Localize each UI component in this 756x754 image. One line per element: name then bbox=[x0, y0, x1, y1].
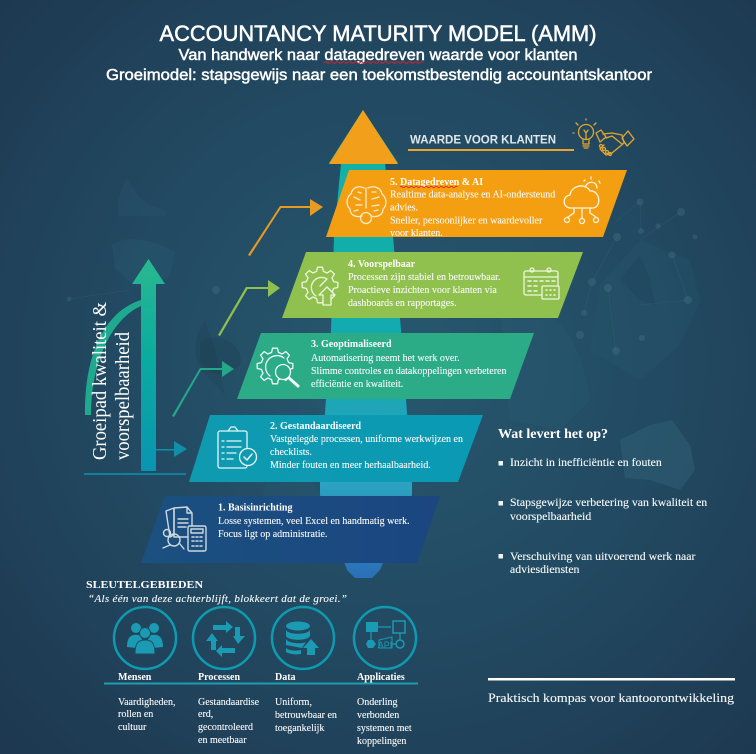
quote: “Als één van deze achterblijft, blokkeert dat de groei.” bbox=[88, 593, 347, 605]
bullet 1: Inzicht in inefficiëntie en fouten bbox=[510, 455, 662, 469]
description: processen: gecontroleerd bbox=[198, 722, 253, 733]
arrow head bbox=[329, 110, 398, 164]
description: applicaties bbox=[357, 697, 412, 747]
text: level 2: checklists. bbox=[270, 447, 312, 458]
description: processen bbox=[198, 697, 260, 746]
description: applicaties: koppelingen bbox=[357, 736, 406, 747]
curved arc bbox=[85, 300, 141, 415]
rotated label: voorspelbaarheid bbox=[112, 332, 134, 460]
text: level 2: 2. Gestandaardiseerd bbox=[270, 421, 362, 432]
text: level 3: Slimme controles en datakoppelingen verbeteren bbox=[311, 366, 506, 377]
description: data: Uniform, bbox=[275, 697, 312, 708]
footer tagline: Praktisch kompas voor kantoorontwikkeling bbox=[488, 690, 735, 705]
icon: process cycle bbox=[193, 607, 255, 669]
small arrow right bbox=[156, 441, 187, 457]
description: data: betrouwbaar en bbox=[275, 710, 337, 721]
level 1 band bbox=[141, 496, 440, 563]
panel: benefits bbox=[498, 427, 707, 576]
text: level 2: Minder fouten en meer herhaalbaarheid. bbox=[270, 460, 431, 471]
description: data bbox=[275, 697, 337, 734]
text: level 4: dashboards en rapportages. bbox=[348, 298, 457, 309]
text: level 5: advies. bbox=[390, 202, 418, 214]
rotated label: Groeipad kwaliteit & bbox=[89, 302, 111, 460]
baseline bbox=[84, 473, 186, 475]
text: level 5: Realtime data-analyse en AI-ondersteund bbox=[390, 190, 555, 200]
icon: brain bbox=[347, 187, 386, 224]
level 4 band bbox=[282, 252, 583, 318]
text: level 4: 4. Voorspelbaar bbox=[348, 259, 416, 270]
divider labels bbox=[104, 672, 418, 684]
side growth arrow bbox=[84, 259, 187, 475]
description: applicaties: Onderling bbox=[357, 697, 398, 708]
divider labels: Processen bbox=[198, 672, 240, 683]
text: level 4: Processen zijn stabiel en betrouwbaar. bbox=[348, 272, 500, 283]
description: data: toegankelijk bbox=[275, 723, 324, 734]
text: level 5: Sneller, persoonlijker en waardevoller bbox=[390, 216, 543, 226]
text: level 2: Vastgelegde processen, uniforme werkwijzen en bbox=[270, 434, 463, 445]
bullet 2: Stapsgewijze verbetering van kwaliteit en bbox=[510, 495, 707, 509]
bullet 2 bbox=[498, 495, 707, 523]
description: applicaties: systemen met bbox=[357, 723, 412, 734]
text: level 1: Losse systemen, veel Excel en handmatig werk. bbox=[218, 516, 410, 527]
icon: documents and calculator bbox=[163, 507, 206, 551]
description: mensen: Vaardigheden, bbox=[118, 697, 175, 708]
text: level 3: 3. Geoptimaliseerd bbox=[311, 339, 392, 350]
text: level 4: Proactieve inzichten voor klanten via bbox=[348, 285, 497, 296]
text: level 3: Automatisering neemt het werk over. bbox=[311, 353, 460, 364]
icon: calendar bbox=[524, 268, 559, 299]
icon: AI cloud bbox=[564, 177, 600, 224]
level 3 band bbox=[237, 333, 534, 399]
panel: key areas bbox=[86, 579, 418, 747]
icon: people bbox=[114, 607, 176, 669]
icon: gear with arrow bbox=[302, 267, 338, 305]
text: level 2 bbox=[270, 421, 463, 471]
text: level 4 bbox=[348, 259, 500, 309]
level 5 band bbox=[326, 170, 627, 239]
spelling underline bbox=[324, 62, 423, 63]
text: level 1: 1. Basisinrichting bbox=[218, 502, 292, 514]
text: level 3: efficiëntie en kwaliteit. bbox=[311, 379, 403, 390]
world map backdrop bbox=[66, 178, 700, 560]
heading: Wat levert het op? bbox=[498, 427, 608, 442]
text: level 5: 5. Datagedreven & AI bbox=[390, 177, 483, 188]
heading: SLEUTELGEBIEDEN bbox=[86, 579, 203, 591]
divider labels: Applicaties bbox=[357, 672, 405, 683]
title block bbox=[106, 21, 652, 84]
icon: applications API: API bbox=[378, 640, 392, 650]
rotated label bbox=[89, 302, 134, 460]
text: level 5: voor klanten. bbox=[390, 228, 443, 239]
description: mensen: rollen en bbox=[118, 709, 153, 720]
description: mensen: cultuur bbox=[118, 722, 147, 733]
arrow to level 3 bbox=[172, 361, 234, 417]
description: processen: erd, bbox=[198, 709, 213, 720]
bullet 2: voorspelbaarheid bbox=[510, 509, 591, 523]
text: level 3 bbox=[311, 339, 506, 390]
icon: lightbulb and handshake bbox=[573, 119, 634, 156]
bullet 3 bbox=[498, 549, 695, 576]
description: applicaties: verbonden bbox=[357, 710, 399, 721]
icon: database bbox=[272, 607, 334, 669]
icon: gear with magnifier bbox=[257, 348, 298, 386]
divider labels: Mensen bbox=[118, 672, 152, 683]
text: level 5 bbox=[390, 177, 555, 239]
vertical arrow bbox=[132, 259, 165, 471]
description: processen: Gestandaardise bbox=[198, 697, 260, 708]
subtitle line 2: Groeimodel: stapsgewijs naar een toekomstbestendig accountantskantoor bbox=[106, 67, 652, 84]
subtitle line 1: Van handwerk naar datagedreven waarde voor klanten bbox=[178, 47, 578, 64]
arrow to level 4 bbox=[218, 280, 280, 336]
central growth arrow bbox=[320, 110, 412, 578]
icon: clipboard checklist bbox=[218, 427, 256, 468]
main title: ACCOUNTANCY MATURITY MODEL (AMM) bbox=[160, 21, 596, 46]
description: mensen bbox=[118, 697, 175, 733]
divider labels: Data bbox=[275, 672, 296, 683]
value for clients heading: WAARDE VOOR KLANTEN bbox=[410, 132, 556, 146]
description: processen: en meetbaar bbox=[198, 735, 247, 746]
arrow to level 5 bbox=[248, 199, 323, 256]
text: level 1 bbox=[218, 502, 410, 540]
bullet 3: adviesdiensten bbox=[510, 562, 580, 576]
icon: applications API bbox=[354, 607, 416, 669]
bullet 3: Verschuiving van uitvoerend werk naar bbox=[510, 549, 695, 563]
level 2 band bbox=[189, 415, 483, 482]
text: level 1: Focus ligt op administratie. bbox=[218, 529, 327, 540]
